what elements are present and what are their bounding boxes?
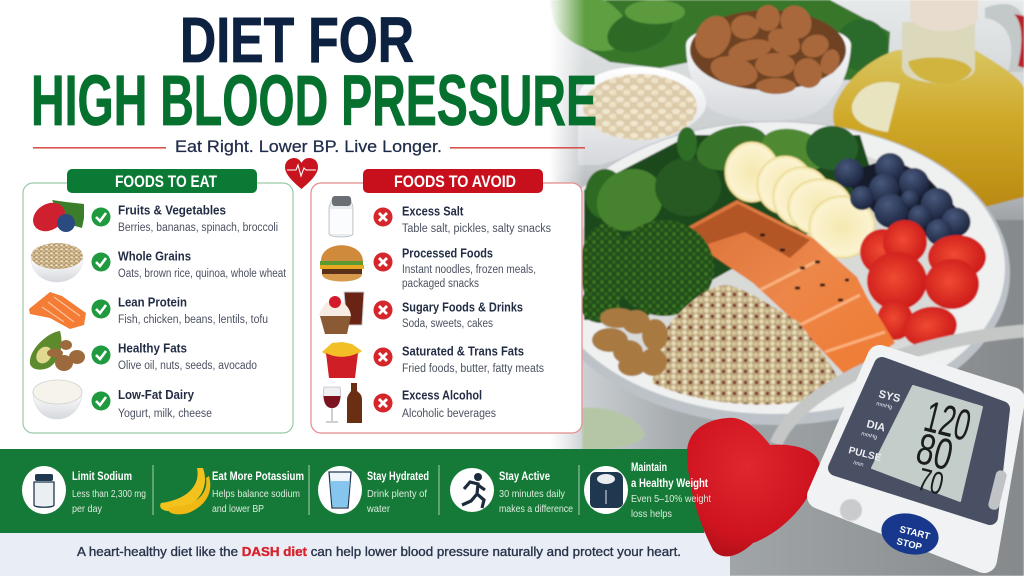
title line 1: DIET FOR	[180, 4, 414, 76]
start stop button: START	[898, 524, 931, 542]
photo: plate	[540, 121, 1010, 425]
icon: heart with pulse	[285, 158, 318, 189]
tip: limit sodium: per day	[72, 503, 103, 515]
item: excess salt: Excess Salt	[402, 204, 464, 218]
item: saturated and trans fats: Fried foods, butter, fatty meats	[402, 363, 544, 375]
tip: stay active: makes a difference	[499, 503, 573, 515]
item: lean protein	[118, 296, 268, 326]
photo: banana slices	[725, 142, 875, 258]
title	[31, 4, 597, 141]
item: excess alcohol	[402, 388, 496, 420]
photo: salad greens	[543, 0, 890, 80]
dividers	[152, 465, 580, 515]
photo: tomatoes	[860, 220, 986, 351]
icon: salmon	[29, 292, 86, 329]
icon: wine and bottle	[323, 383, 362, 423]
item: saturated and trans fats	[402, 344, 544, 375]
tip: stay hydrated	[318, 466, 429, 515]
item: saturated and trans fats: Saturated & Trans Fats	[402, 344, 524, 358]
icon: yogurt bowl	[33, 380, 82, 419]
footer strip	[0, 533, 730, 576]
icon: avocado and nuts	[30, 331, 85, 371]
tip: eat more potassium: Eat More Potassium	[212, 471, 304, 483]
tip: stay active: Stay Active	[499, 471, 550, 483]
item: low-fat dairy: Yogurt, milk, cheese	[118, 408, 212, 420]
start stop button: STOP	[895, 536, 924, 553]
monitor labels: mmHg	[876, 401, 893, 411]
item: lean protein: Fish, chicken, beans, lentils, tofu	[118, 314, 268, 326]
tip: maintain a healthy weight	[584, 462, 711, 520]
photo: oats bowl	[578, 67, 706, 165]
monitor labels	[847, 388, 902, 468]
item: excess salt	[402, 204, 551, 235]
panel: lifestyle tips band	[0, 449, 704, 533]
tip: limit sodium	[22, 466, 146, 515]
item: low-fat dairy: Low-Fat Dairy	[118, 388, 194, 402]
monitor readings: 70	[914, 461, 947, 502]
item: lean protein: Lean Protein	[118, 296, 187, 310]
monitor readings: 120	[920, 392, 976, 450]
item: processed foods: packaged snacks	[402, 278, 479, 290]
tip: limit sodium: Limit Sodium	[72, 471, 132, 483]
item: excess alcohol: Excess Alcohol	[402, 388, 482, 402]
item: sugary foods and drinks: Soda, sweets, cakes	[402, 318, 493, 330]
monitor labels: /min	[853, 460, 864, 468]
monitor labels: SYS	[877, 388, 902, 405]
item: processed foods: Processed Foods	[402, 246, 493, 260]
item: processed foods	[402, 246, 536, 290]
tip: limit sodium: Less than 2,300 mg	[72, 488, 146, 500]
title line 2: HIGH BLOOD PRESSURE	[31, 62, 597, 141]
start stop button	[877, 508, 943, 560]
monitor small button	[840, 499, 862, 521]
photo: broccoli	[580, 220, 714, 323]
panel: foods to avoid	[311, 169, 582, 433]
photo: spinach leaves	[585, 118, 858, 243]
item: fruits and vegetables: Berries, bananas, spinach, broccoli	[118, 222, 278, 234]
white fade behind left content	[530, 0, 585, 450]
icon: strawberry and blueberry	[28, 197, 84, 237]
panel: foods to eat	[23, 169, 293, 433]
icon: cupcake and soda	[319, 292, 364, 334]
photo: blueberries	[834, 153, 970, 245]
tip: maintain a healthy weight: Maintain	[631, 462, 667, 474]
item: healthy fats: Olive oil, nuts, seeds, avocado	[118, 360, 257, 372]
item: excess alcohol: Alcoholic beverages	[402, 408, 496, 420]
photo: mint leaf	[582, 408, 645, 450]
cross icons	[374, 208, 392, 412]
icon: salt shaker	[329, 196, 353, 237]
item: whole grains: Whole Grains	[118, 250, 191, 264]
tip: stay active: 30 minutes daily	[499, 488, 566, 500]
monitor labels: mmHg	[861, 431, 878, 441]
item: healthy fats	[118, 342, 257, 372]
icon: fries	[322, 342, 362, 378]
photo: olive oil jug	[833, 0, 1024, 208]
monitor labels: DIA	[865, 418, 887, 435]
heading: foods to avoid: FOODS TO AVOID	[394, 172, 516, 191]
tip: maintain a healthy weight: loss helps	[631, 508, 672, 520]
heading: foods to avoid	[363, 169, 543, 193]
photo surface	[530, 0, 1024, 576]
photo: blood pressure monitor	[820, 358, 1012, 560]
item: fruits and vegetables	[118, 204, 278, 234]
item: excess salt: Table salt, pickles, salty snacks	[402, 223, 551, 235]
monitor labels: PULSE	[847, 445, 883, 464]
monitor face	[836, 365, 1002, 517]
item: sugary foods and drinks	[402, 300, 523, 330]
icon: burger	[320, 245, 364, 282]
photo: cuff tube	[776, 331, 1024, 444]
tip: eat more potassium: Helps balance sodium	[212, 488, 300, 500]
footer note: A heart-healthy diet like the DASH diet can help lower blood pressure naturally and protect your heart.	[77, 544, 681, 559]
photo: red stress heart	[687, 418, 820, 556]
photo: almond bowl	[686, 0, 851, 121]
tip: stay hydrated: Drink plenty of	[367, 488, 427, 500]
photo: walnuts	[592, 308, 668, 376]
photo: salmon fillet	[688, 200, 895, 377]
item: fruits and vegetables: Fruits & Vegetables	[118, 204, 226, 218]
tagline: Eat Right. Lower BP. Live Longer.	[175, 137, 442, 156]
item: sugary foods and drinks: Sugary Foods & Drinks	[402, 300, 523, 314]
item: whole grains	[118, 250, 287, 280]
monitor body	[820, 358, 1012, 560]
tip: stay hydrated: Stay Hydrated	[367, 471, 429, 483]
item: healthy fats: Healthy Fats	[118, 342, 187, 356]
icon: oats bowl	[31, 243, 83, 282]
item: whole grains: Oats, brown rice, quinoa, whole wheat	[118, 268, 287, 280]
heading: foods to eat: FOODS TO EAT	[115, 172, 217, 191]
tip: stay active	[450, 468, 573, 515]
item: processed foods: Instant noodles, frozen meals,	[402, 264, 536, 276]
check icons	[92, 208, 110, 410]
tip: eat more potassium: and lower BP	[212, 503, 264, 515]
tip: eat more potassium	[160, 468, 304, 515]
monitor readings	[912, 392, 976, 502]
tip: stay hydrated: water	[366, 503, 390, 515]
monitor side button	[987, 469, 1008, 511]
tip: maintain a healthy weight: a Healthy Weight	[631, 478, 708, 490]
white left area	[0, 0, 530, 450]
heading: foods to eat	[67, 169, 257, 193]
food photo composition	[530, 0, 1024, 576]
photo: quinoa	[652, 285, 837, 405]
item: low-fat dairy	[118, 388, 212, 420]
monitor screen	[872, 386, 982, 501]
tip: maintain a healthy weight: Even 5–10% weight	[631, 493, 711, 505]
monitor readings: 80	[912, 424, 958, 481]
